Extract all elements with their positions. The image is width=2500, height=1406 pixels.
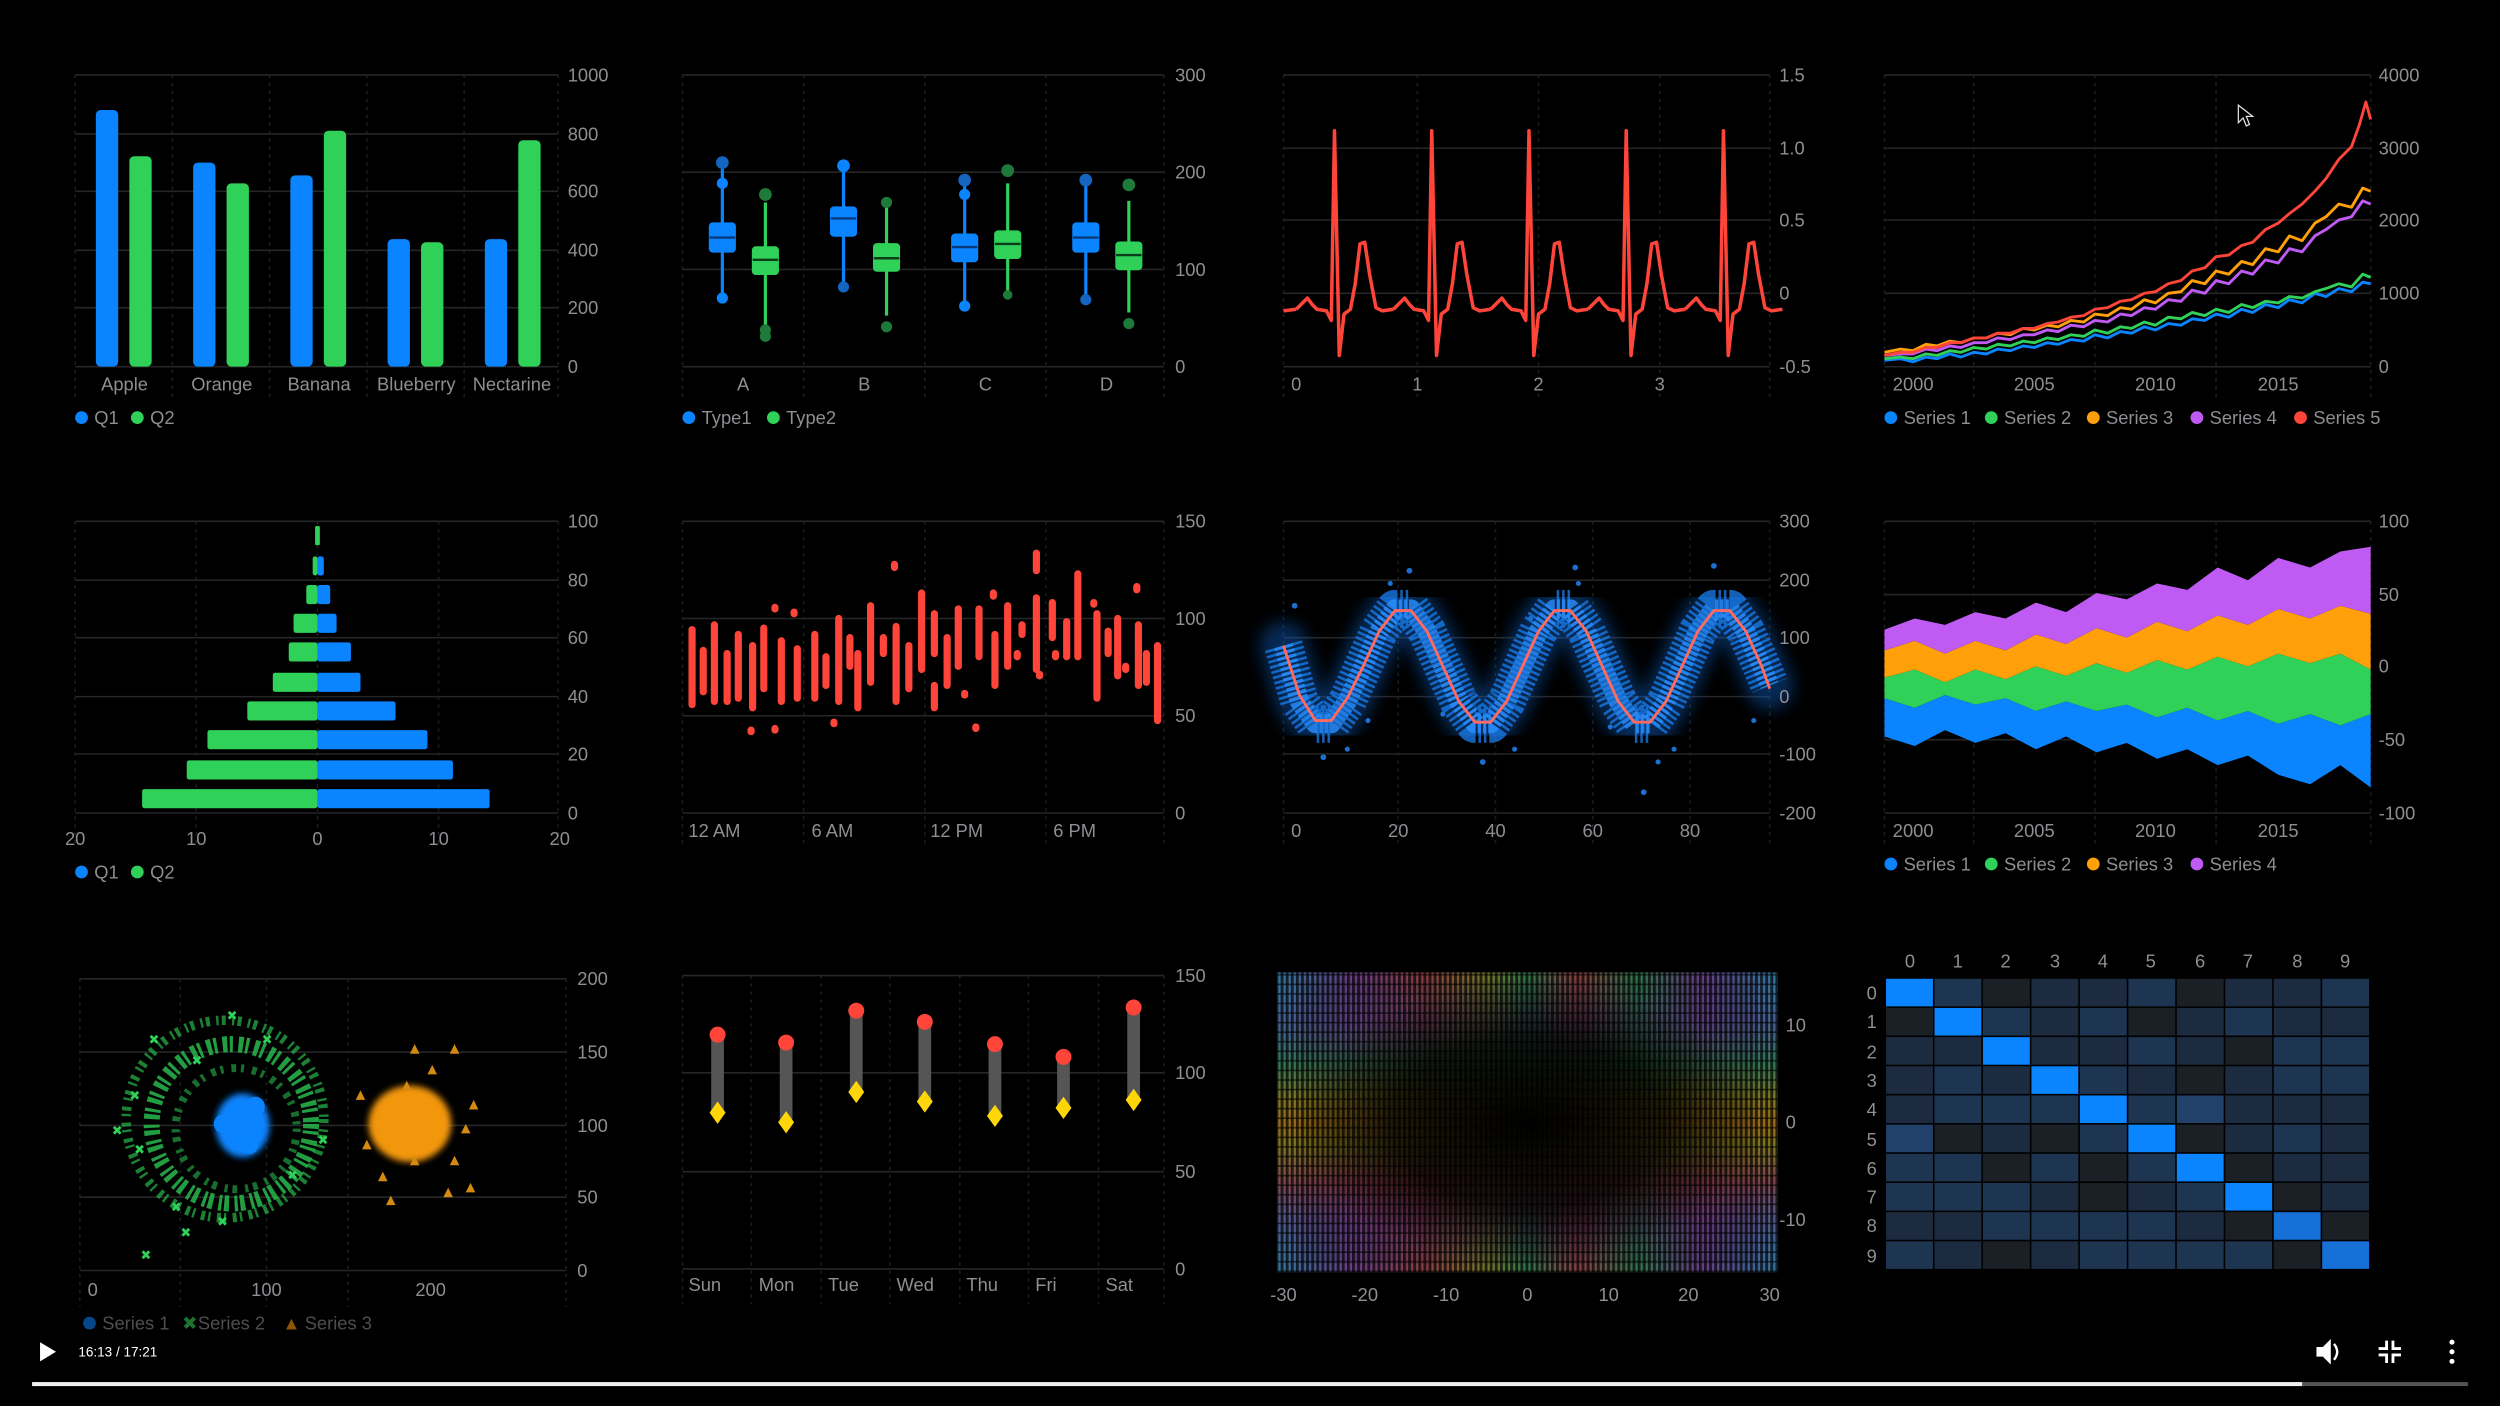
x axis labels: B [858,374,870,395]
row labels: 5 [1867,1129,1877,1150]
y axis labels: 20 [568,743,588,764]
series 3 cluster [356,1044,478,1205]
x axis labels: 0 [88,1279,98,1300]
legend: Series 3 [2106,853,2173,874]
legend: Q1 [94,407,119,428]
x axis labels [1893,820,2299,841]
panel: scatter sine with fit [1283,511,1816,845]
video controls bar [32,1339,2468,1386]
y axis labels: 100 [568,511,598,532]
y axis labels: 4000 [2379,64,2419,85]
markers low [710,1081,1142,1133]
legend [682,407,836,428]
y axis labels [1779,1014,1806,1230]
legend: ▲ [282,1312,301,1333]
panel: heatmap [1867,951,2369,1269]
legend: Series 1 [102,1312,169,1333]
x axis labels [688,820,1096,841]
layer: series 1 [1884,695,2371,787]
y axis labels [577,968,608,1281]
x axis labels: 30 [1759,1284,1780,1305]
x axis labels: Wed [897,1274,934,1295]
x axis labels: 0 [312,828,323,849]
range bars [711,1007,1140,1122]
y axis labels: 1000 [568,64,609,85]
legend: Type2 [786,407,836,428]
x axis labels: Thu [966,1274,998,1295]
panel: daily range lollipops [682,965,1206,1304]
x axis labels: Nectarine [473,374,551,395]
bars Q2 [129,131,541,367]
y axis labels: -0.5 [1779,356,1811,377]
y axis labels: 0 [1175,356,1185,377]
column labels: 2 [2001,951,2011,972]
y axis labels: 0 [1175,1258,1185,1279]
x axis labels: 2010 [2135,820,2176,841]
x axis labels: 20 [65,828,85,849]
panel: grouped bar chart [75,64,609,428]
x axis labels: 40 [1485,820,1506,841]
panel: range bars by hour [682,511,1206,845]
y axis labels: 0 [2379,656,2389,677]
panel: streamgraph [1884,511,2415,874]
panel: multi-series line chart [1884,64,2419,428]
series 2 ring [126,1020,324,1218]
y axis labels: 1.0 [1779,138,1805,159]
icon: exit fullscreen [2379,1341,2401,1363]
x axis labels [1270,1284,1780,1305]
legend [1884,407,2381,428]
column labels [1905,951,2350,972]
x axis labels: -10 [1433,1284,1459,1305]
y axis labels: 0 [568,802,578,823]
y axis labels [2379,64,2419,377]
panel: cluster scatter: ✖ [129,1088,140,1103]
layer: series 4 [1884,547,2371,654]
y axis labels: 200 [568,297,598,318]
x axis labels: Tue [828,1274,859,1295]
y axis labels: -200 [1779,802,1816,823]
legend [1884,853,2277,874]
x axis labels: 10 [186,828,206,849]
y axis labels: 10 [1786,1014,1806,1035]
row labels: 3 [1867,1070,1877,1091]
legend [83,1312,372,1333]
legend [75,861,175,882]
y axis labels: 50 [2379,584,2399,605]
y axis labels: 100 [1175,1062,1206,1083]
x axis labels: C [979,374,992,395]
y axis labels: 150 [577,1041,608,1062]
x axis labels: 12 AM [688,820,740,841]
panel: box plot [682,64,1206,428]
icon: play [40,1342,56,1361]
y axis labels: 150 [1175,511,1206,532]
cells [1886,979,2369,1269]
row labels: 0 [1867,983,1877,1004]
y axis labels: -100 [2379,802,2415,823]
panel: cluster scatter: ✖ [217,1214,228,1229]
boxes Type1 [710,156,1099,312]
panel: cluster scatter: ✖ [112,1123,122,1138]
y axis labels [1175,965,1206,1279]
scatter band [1283,609,1770,724]
x axis labels: 2015 [2258,374,2299,395]
panel: cluster scatter: ✖ [171,1200,181,1215]
y axis labels: 100 [2379,511,2409,532]
y axis labels: 50 [1175,1161,1195,1182]
y axis labels: 50 [577,1187,598,1208]
panel: cluster scatter: ✖ [134,1142,145,1157]
y axis labels [1175,64,1206,377]
legend: Series 5 [2313,407,2381,428]
y axis labels [568,64,609,377]
bars Q1 [96,110,507,367]
panel: cluster scatter: ✖ [317,1133,328,1148]
panel: ECG line chart [1283,64,1811,402]
x axis labels [1291,374,1665,395]
x axis labels [737,374,1113,395]
column labels: 4 [2098,951,2108,972]
y axis labels: 800 [568,123,598,144]
column labels: 8 [2292,951,2302,972]
x axis labels: 0 [1291,820,1301,841]
x axis labels: Orange [191,374,252,395]
icon: more menu [2449,1340,2455,1364]
y axis labels [2379,511,2415,823]
y axis labels: 1.5 [1779,64,1805,85]
x axis labels: Mon [759,1274,794,1295]
x axis labels: 6 PM [1053,820,1096,841]
legend: Series 2 [2004,853,2071,874]
lines [1884,102,2371,362]
y axis labels: 300 [1175,64,1206,85]
legend: Series 2 [198,1312,265,1333]
line: signal [1283,131,1782,355]
column labels: 6 [2195,951,2205,972]
y axis labels: -100 [1779,743,1816,764]
x axis labels: 20 [1678,1284,1699,1305]
legend: ✖ [182,1312,197,1333]
y axis labels: -50 [2379,729,2405,750]
y axis labels: 0 [1779,283,1789,304]
x axis labels: A [737,374,750,395]
y axis labels: 100 [1779,627,1810,648]
legend: Series 4 [2210,853,2277,874]
x axis labels: 2000 [1893,374,1934,395]
y axis labels: 400 [568,240,598,261]
panel: cluster scatter: ✖ [180,1225,191,1240]
legend: Q2 [150,407,175,428]
y axis labels: 80 [568,570,588,591]
row labels: 7 [1867,1187,1877,1208]
y axis labels: 2000 [2379,209,2419,230]
x axis labels: -20 [1352,1284,1378,1305]
timestamp: 16:13 / 17:21 [78,1345,157,1360]
series 1 cluster [214,1094,270,1157]
x axis labels [1893,374,2299,395]
y axis labels: 100 [1175,259,1206,280]
y axis labels: 100 [1175,608,1206,629]
x axis labels: 2 [1533,374,1544,395]
row labels: 6 [1867,1158,1877,1179]
x axis labels: 2000 [1893,820,1934,841]
panel: vector field [1270,972,1806,1305]
bars Q2 [142,526,320,808]
fit line [1283,611,1770,722]
x axis labels: Blueberry [377,374,456,395]
y axis labels: 1000 [2379,283,2419,304]
y axis labels: 300 [1779,511,1810,532]
x axis labels: 80 [1680,820,1700,841]
y axis labels: 0 [568,356,578,377]
row labels: 8 [1867,1215,1877,1236]
x axis labels [65,828,570,849]
x axis labels: 60 [1583,820,1603,841]
y axis labels [568,511,598,823]
legend [75,407,175,428]
x axis labels: 100 [251,1279,282,1300]
markers high [710,1000,1142,1065]
row labels: 9 [1867,1246,1877,1267]
y axis labels [1175,511,1206,823]
legend: Series 2 [2004,407,2071,428]
x axis labels: 10 [428,828,449,849]
x axis labels: 20 [1388,820,1408,841]
layer: series 2 [1884,654,2371,725]
y axis labels: 0 [577,1260,587,1281]
column labels: 7 [2243,951,2253,972]
y axis labels: 200 [1779,570,1810,591]
panel: cluster scatter: ✖ [262,1032,272,1047]
legend: Series 4 [2210,407,2277,428]
column labels: 9 [2340,951,2350,972]
x axis labels [1291,820,1700,841]
y axis labels: 600 [568,181,598,202]
legend: Q1 [94,861,119,882]
x axis labels: 200 [415,1279,446,1300]
x axis labels: 12 PM [930,820,983,841]
bars Q1 [317,556,490,808]
x axis labels: 3 [1655,374,1665,395]
x axis labels: 2005 [2014,374,2055,395]
legend: Q2 [150,861,175,882]
column labels: 1 [1953,951,1963,972]
x axis labels: 10 [1598,1284,1619,1305]
icon: volume [2316,1339,2337,1365]
y axis labels: 200 [577,968,608,989]
y axis labels: 0 [1175,802,1185,823]
y axis labels [1779,511,1816,823]
icon: mouse cursor [2238,105,2253,126]
y axis labels: 0 [2379,356,2389,377]
x axis labels: Sun [689,1274,721,1295]
outlier dots [1292,563,1756,795]
row labels: 4 [1867,1099,1877,1120]
panel: cluster scatter: ✖ [141,1247,151,1262]
column labels: 5 [2146,951,2156,972]
x axis labels [689,1274,1133,1295]
panel: cluster scatter: ✖ [287,1168,298,1183]
x axis labels: -30 [1270,1284,1297,1305]
panel: cluster scatter: ✖ [192,1053,202,1068]
y axis labels: 100 [577,1115,608,1136]
legend: Type1 [702,407,752,428]
row labels: 2 [1867,1041,1877,1062]
x axis labels: 20 [550,828,570,849]
row labels [1867,983,1877,1267]
y axis labels: 40 [568,686,588,707]
x axis labels: 0 [1291,374,1301,395]
x axis labels: Sat [1106,1274,1133,1295]
column labels: 3 [2050,951,2060,972]
x axis labels: D [1100,374,1113,395]
progress bar [32,1382,2468,1386]
x axis labels: 1 [1412,374,1422,395]
panel: population pyramid [65,511,598,882]
column labels: 0 [1905,951,1915,972]
y axis labels: 200 [1175,162,1206,183]
y axis labels: -10 [1779,1209,1806,1230]
x axis labels: 2015 [2258,820,2299,841]
legend: Series 1 [1904,853,1971,874]
row labels: 1 [1867,1011,1877,1032]
legend: Series 3 [2106,407,2173,428]
x axis labels: 6 AM [811,820,853,841]
y axis labels: 50 [1175,705,1195,726]
y axis labels: 60 [568,627,588,648]
x axis labels [88,1279,446,1300]
x axis labels: Apple [101,374,148,395]
y axis labels [1779,64,1811,377]
x axis labels: 2005 [2014,820,2055,841]
panel: cluster scatter: ✖ [148,1032,159,1047]
y axis labels: 0.5 [1779,209,1805,230]
legend: Series 3 [305,1312,372,1333]
y axis labels: 0 [1779,686,1789,707]
boxes Type2 [753,164,1142,342]
y axis labels: 150 [1175,965,1206,986]
y axis labels: 0 [1786,1112,1796,1133]
panel: cluster scatter [80,968,608,1333]
x axis labels: 2010 [2135,374,2176,395]
x axis labels: 0 [1522,1284,1532,1305]
y axis labels: 3000 [2379,138,2419,159]
legend: Series 1 [1904,407,1971,428]
panel: cluster scatter: ✖ [227,1008,237,1023]
x axis labels [101,374,551,395]
bars [692,553,1158,732]
x axis labels: Banana [287,374,351,395]
layer: series 3 [1884,606,2371,682]
x axis labels: Fri [1035,1274,1057,1295]
